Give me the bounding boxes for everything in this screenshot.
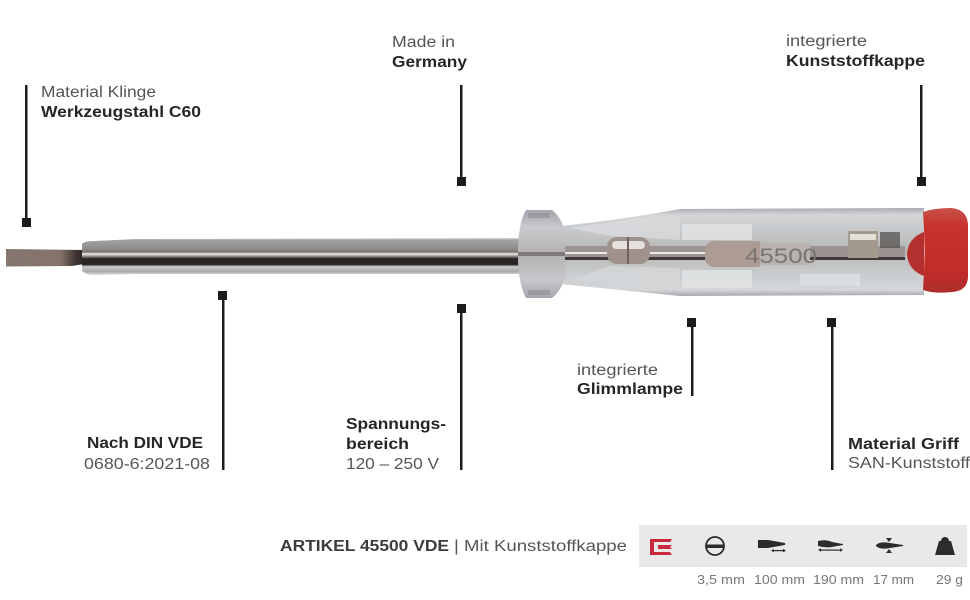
spec values bbox=[697, 573, 963, 587]
neon lamp and inner contact bbox=[565, 231, 905, 267]
label: Spannungsbereich: Spannungs- bbox=[346, 416, 446, 433]
pointer: blade bbox=[22, 85, 31, 227]
label: Nach DIN VDE: Nach DIN VDE bbox=[87, 435, 203, 452]
red cap bbox=[923, 208, 968, 293]
label: Material Griff bbox=[848, 436, 970, 472]
label: Material Klinge bbox=[41, 84, 201, 121]
pointer: DIN VDE bbox=[218, 291, 227, 470]
label: Spannungsbereich bbox=[346, 416, 446, 473]
label: integrierte Glimmlampe: Glimmlampe bbox=[577, 381, 683, 398]
label: integrierte Kunststoffkappe: Kunststoffkappe bbox=[786, 53, 925, 70]
handle body bbox=[560, 208, 924, 296]
spec values: 17 mm bbox=[873, 573, 914, 587]
label: Material Griff: Material Griff bbox=[848, 436, 960, 453]
label: Spannungsbereich: bereich bbox=[346, 436, 409, 453]
label: Made in Germany bbox=[392, 34, 467, 71]
icon: handle diameter bbox=[876, 538, 903, 553]
pointer: Germany bbox=[457, 85, 466, 186]
blade bbox=[6, 249, 84, 266]
label: integrierte Kunststoffkappe: integrierte bbox=[786, 33, 867, 50]
label: Material Klinge: Material Klinge bbox=[41, 84, 156, 101]
shaft bbox=[82, 238, 522, 275]
spec icon bar bbox=[639, 525, 967, 567]
label: integrierte Kunststoffkappe bbox=[786, 33, 925, 70]
red cap inner bbox=[907, 232, 924, 276]
label: Nach DIN VDE: 0680-6:2021-08 bbox=[84, 456, 210, 473]
flange detail bbox=[518, 213, 565, 295]
flange bbox=[518, 210, 565, 298]
label: integrierte Glimmlampe bbox=[577, 362, 683, 398]
article title bbox=[280, 538, 627, 555]
handle inner glass panels bbox=[570, 216, 860, 288]
icon: blade length bbox=[758, 540, 786, 552]
label: Nach DIN VDE bbox=[84, 435, 210, 473]
spec values: 190 mm bbox=[813, 573, 864, 587]
label: Spannungsbereich: 120 – 250 V bbox=[346, 456, 440, 473]
label: Made in Germany: Germany bbox=[392, 54, 467, 71]
pointer: cap bbox=[917, 85, 926, 186]
article title: ARTIKEL 45500 VDE bbox=[280, 538, 449, 555]
pointer: handle material bbox=[827, 318, 836, 470]
label: Material Klinge: Werkzeugstahl C60 bbox=[41, 104, 201, 121]
pointer: glow lamp bbox=[687, 318, 696, 396]
label: integrierte Glimmlampe: integrierte bbox=[577, 362, 658, 379]
handle imprint: 45500 bbox=[745, 245, 817, 268]
label: Made in Germany: Made in bbox=[392, 34, 455, 51]
spec values: 100 mm bbox=[754, 573, 805, 587]
label: Material Griff: SAN-Kunststoff bbox=[848, 455, 970, 472]
pointer: voltage range bbox=[457, 304, 466, 470]
article title: | Mit Kunststoffkappe bbox=[454, 538, 627, 555]
icon: weight bbox=[935, 537, 955, 555]
voltage tester screwdriver bbox=[6, 208, 968, 298]
spec values: 29 g bbox=[936, 573, 963, 587]
spec values: 3,5 mm bbox=[697, 573, 745, 587]
icon: slotted tip bbox=[706, 537, 724, 555]
icon: total length bbox=[818, 540, 843, 552]
icon: brand logo bbox=[650, 539, 672, 555]
